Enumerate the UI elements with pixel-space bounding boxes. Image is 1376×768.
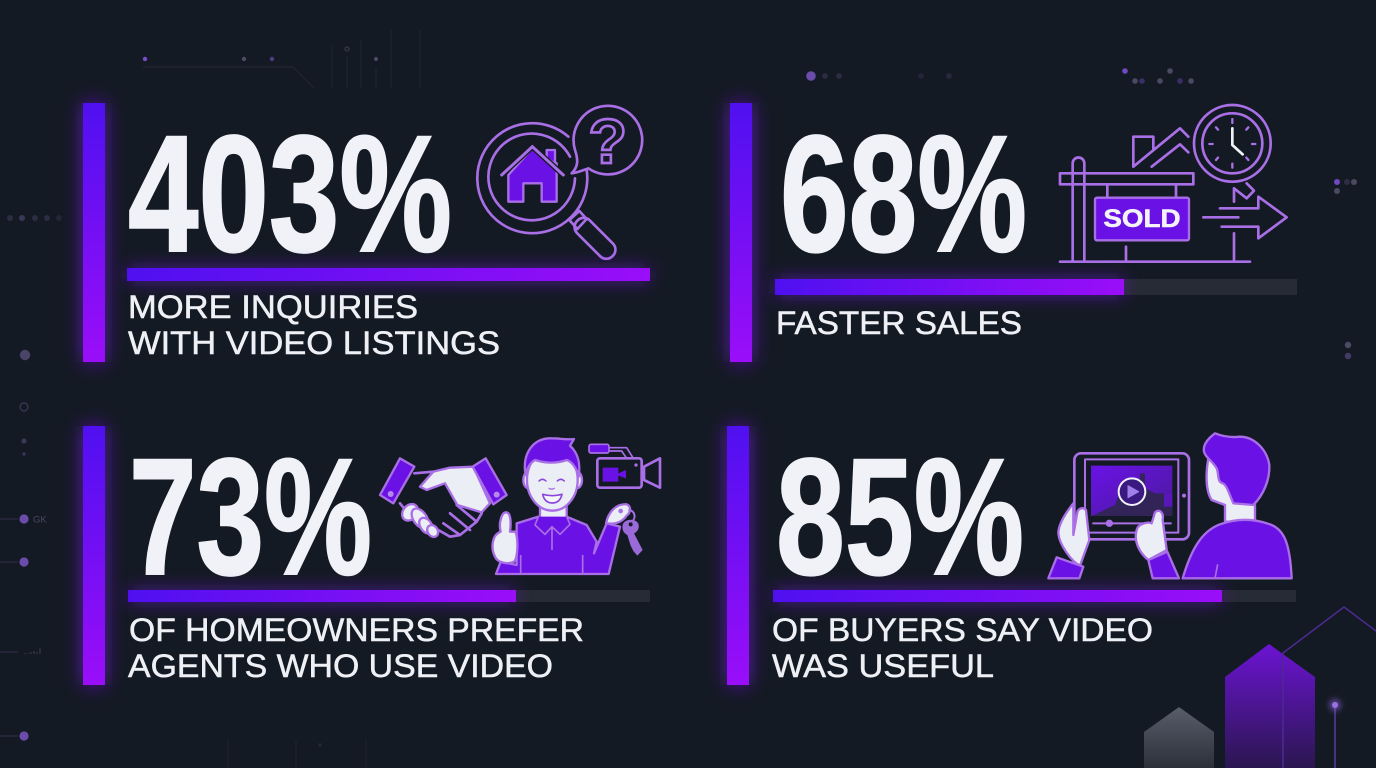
panel: 403% more inquiries — [83, 102, 650, 362]
background tech decoration: top right dots — [806, 68, 1357, 359]
big number: 85% — [776, 425, 1024, 610]
caption — [772, 612, 1153, 684]
caption: WAS USEFUL — [772, 648, 994, 684]
big number: 403% — [128, 102, 452, 287]
background tech decoration: bottom lines — [228, 740, 366, 768]
panel: 68% faster sales — [730, 102, 1297, 362]
caption: MORE INQUIRIES — [128, 289, 418, 325]
accent bar — [730, 103, 752, 362]
icon: sold sign with clock, house and arrow — [1060, 105, 1287, 262]
progress bar — [128, 590, 650, 602]
icon: magnifier over house with question bubble — [477, 106, 642, 262]
icon: magnifier over house with question bubble: ? — [588, 107, 627, 177]
icon: handshake, smiling agent, keys and camera — [380, 438, 660, 574]
panel: 73% of homeowners — [83, 425, 660, 685]
caption: AGENTS WHO USE VIDEO — [128, 648, 553, 684]
caption: OF HOMEOWNERS PREFER — [129, 612, 584, 648]
caption — [128, 289, 500, 361]
caption: OF BUYERS SAY VIDEO — [772, 612, 1153, 648]
bottom right decoration: houses — [1144, 607, 1376, 768]
progress bar — [773, 590, 1296, 602]
icon: sold sign with clock, house and arrow: SOLD — [1103, 205, 1181, 233]
big number: 68% — [780, 102, 1027, 287]
caption — [128, 612, 584, 684]
background tech decoration: left side nodes: GK — [33, 514, 47, 526]
icon: person watching video on a tablet — [1048, 433, 1292, 578]
accent bar — [83, 103, 105, 362]
progress bar — [775, 279, 1297, 295]
background tech decoration: left side nodes — [0, 215, 62, 741]
caption: FASTER SALES — [776, 305, 1022, 341]
big number: 73% — [129, 425, 372, 610]
progress bar — [127, 268, 650, 281]
accent bar — [727, 426, 749, 685]
background tech decoration: top left circuit — [143, 30, 420, 88]
caption: WITH VIDEO LISTINGS — [128, 325, 500, 361]
accent bar — [83, 426, 105, 685]
panel: 85% of buyers — [727, 425, 1296, 685]
